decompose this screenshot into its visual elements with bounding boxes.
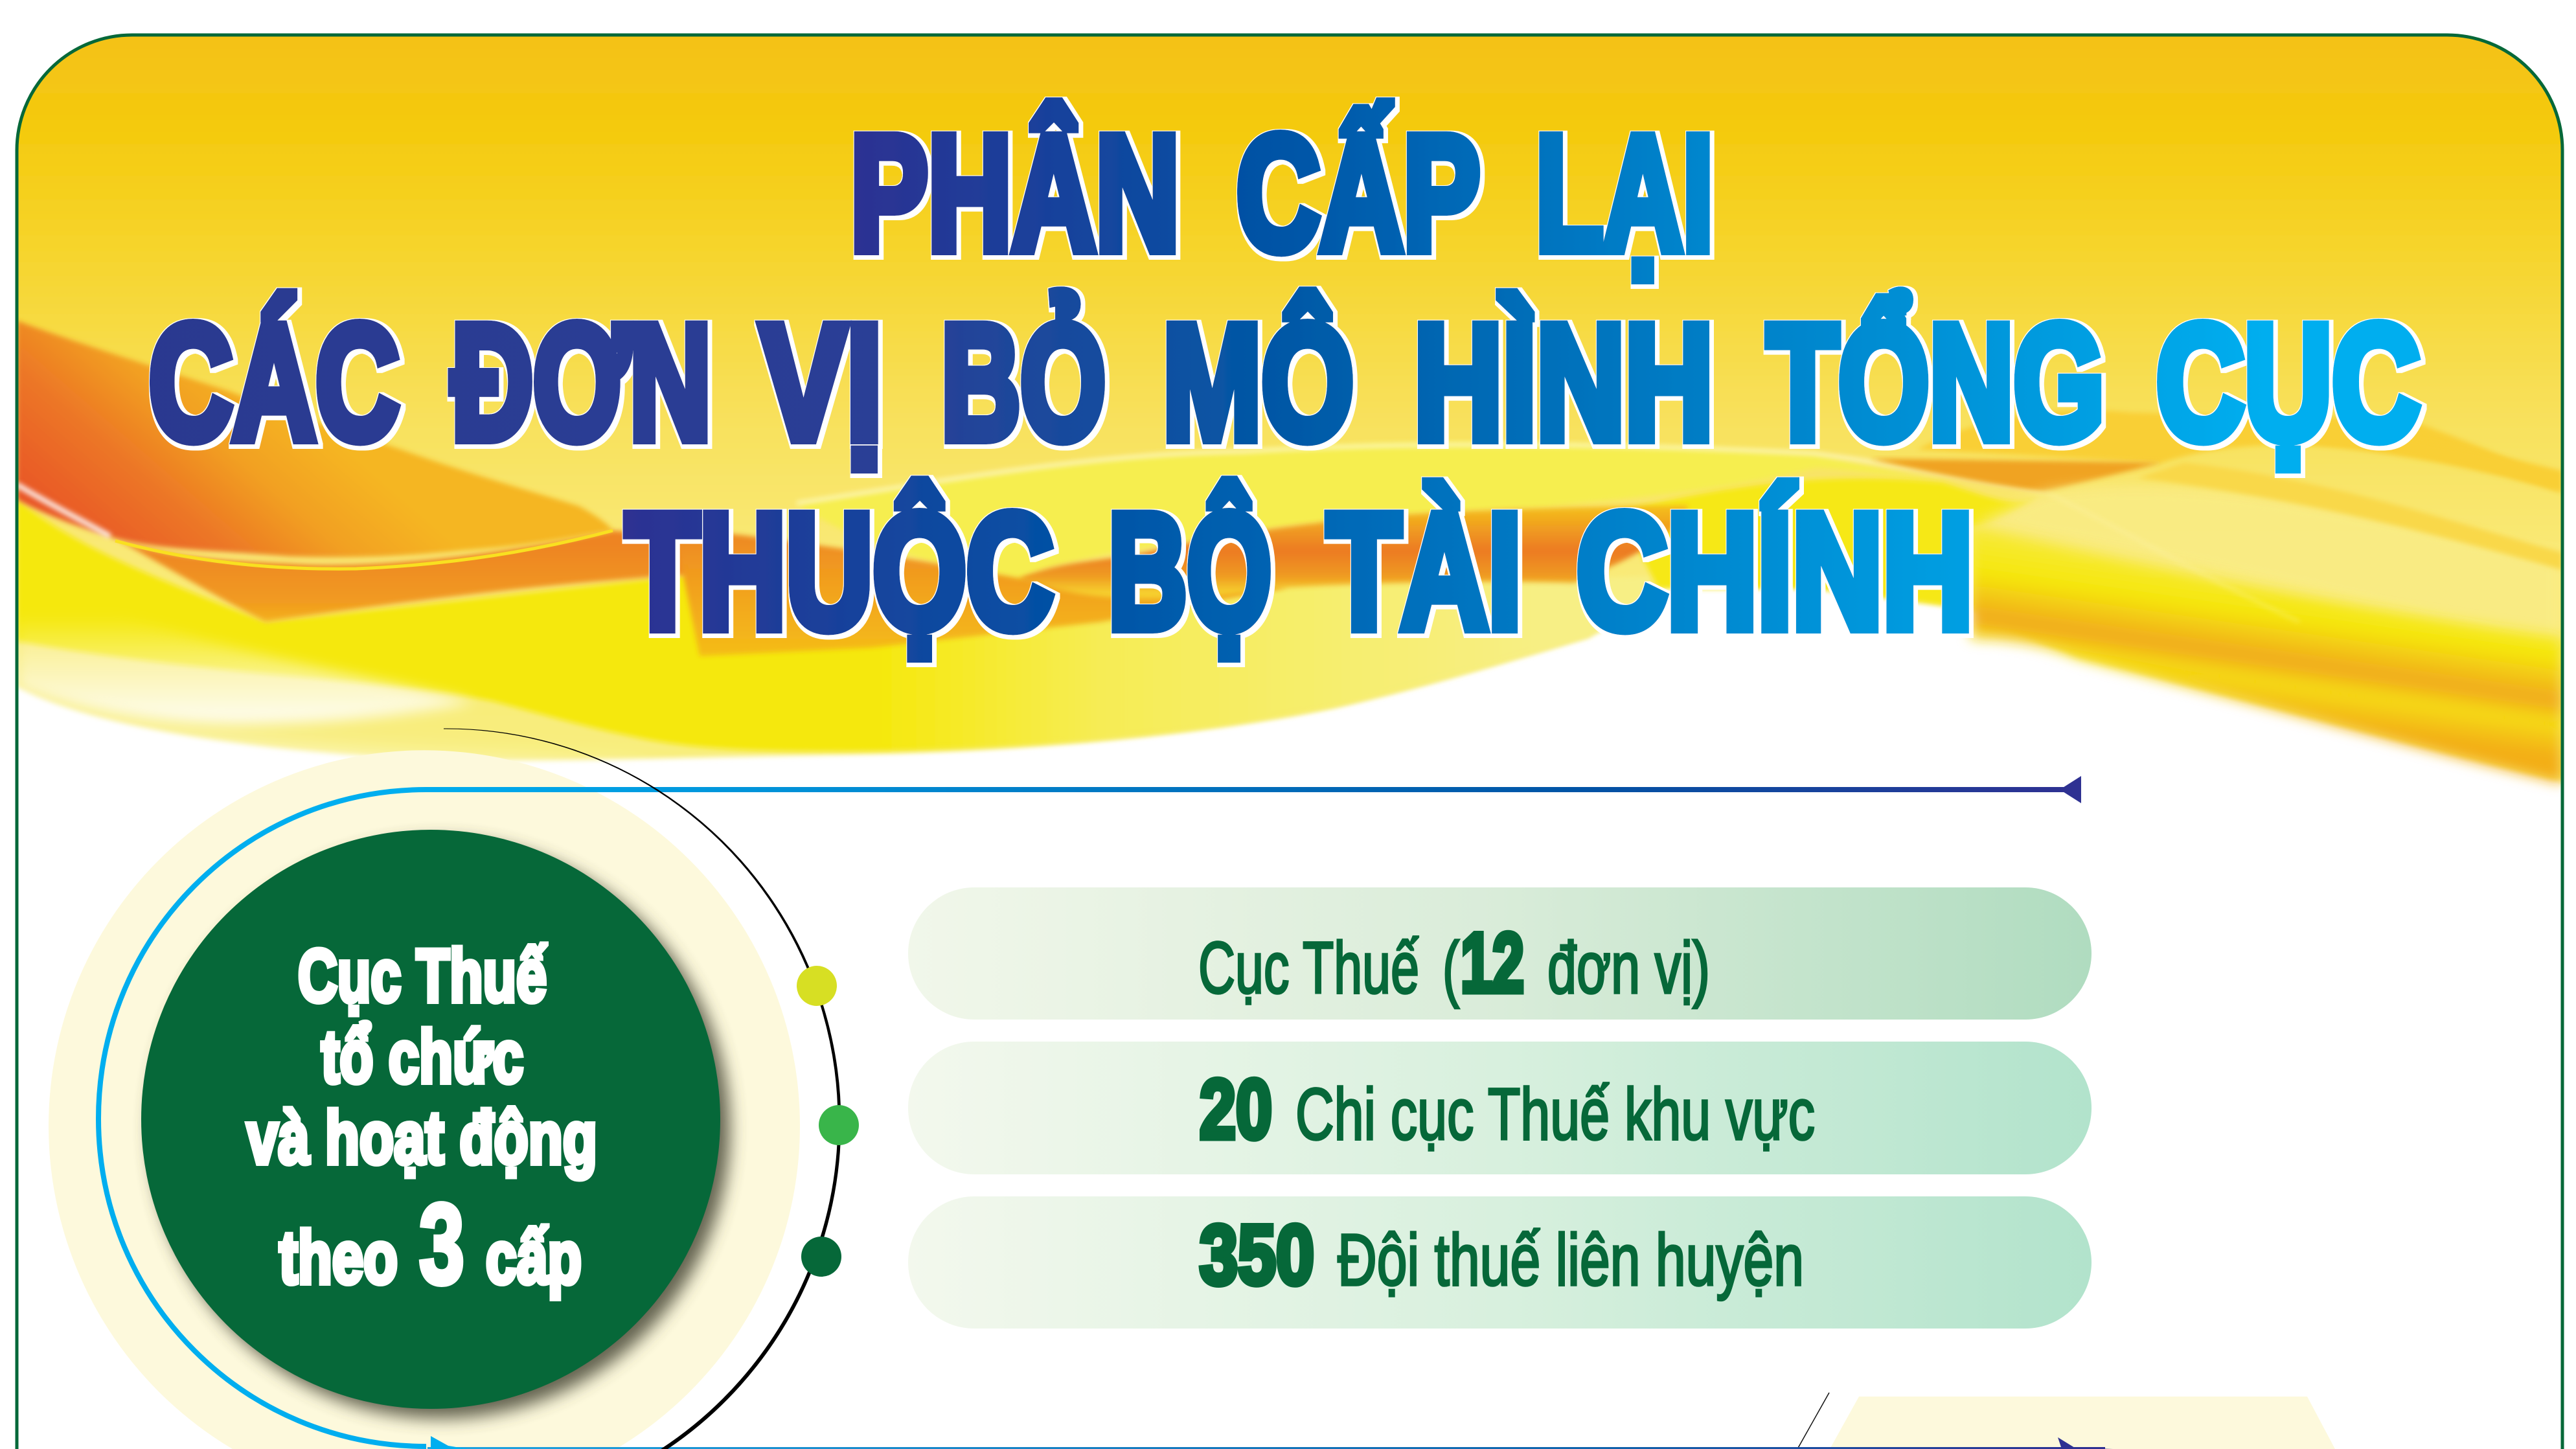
title: [149, 102, 2420, 663]
title line 2: HÌNH: [1414, 291, 1713, 473]
thin black line at bottom: [1797, 1393, 1829, 1449]
blue arc and top connector line: [98, 790, 2066, 1446]
title line 1: [850, 102, 1713, 284]
circle text: và hoạt động: [247, 1097, 597, 1180]
wave: light amber stripe one: [2137, 462, 2562, 570]
wave: right yellow orange wedge: [1971, 526, 2562, 783]
circle text: tổ chức: [321, 1016, 523, 1099]
wave: yellow ridge behind right text: [1619, 479, 2046, 609]
title line 2: TỔNG: [1767, 291, 2104, 473]
circle text: cấp: [486, 1216, 582, 1299]
green circle shadow: [151, 839, 730, 1419]
title line 1: PHÂN: [850, 102, 1180, 284]
pill: 350 Doi thue lien huyen: [908, 1196, 2092, 1329]
cream shape at bottom right: [1830, 1397, 2335, 1449]
pill: Cuc Thue 12 don vi: [908, 887, 2092, 1020]
panel: Cuc Thue circle diagram: [49, 729, 2335, 1449]
wave: lens highlight line: [797, 444, 2046, 503]
wave: bottom left white fade: [85, 711, 626, 763]
wave: left white lens: [18, 618, 473, 733]
title line 1: CẤP: [1237, 102, 1480, 284]
title line 3: CHÍNH: [1577, 481, 1973, 663]
wave: orange diamond right: [1870, 459, 2163, 492]
title line 3: [626, 481, 1973, 663]
wave: yellow base: [0, 0, 2576, 785]
title line 3: THUỘC: [626, 481, 1053, 663]
dot green: [819, 1105, 859, 1145]
pill: 20 Chi cuc Thue khu vuc: [908, 1042, 2092, 1174]
title line 2: CỤC: [2156, 291, 2420, 473]
circle text: 3: [419, 1181, 464, 1308]
dot yellow: [797, 966, 837, 1006]
wave: thin yellow ribbon: [115, 531, 613, 569]
title line 1: LẠI: [1536, 102, 1713, 284]
cream halo circle: [49, 750, 800, 1449]
wave: thin white highlight left: [17, 485, 110, 536]
wave: middle orange band: [1020, 505, 1689, 599]
circle text: theo: [279, 1216, 398, 1299]
dot dark green: [801, 1237, 841, 1277]
wave: lower orange band left: [115, 531, 694, 622]
arrow head bottom left: [431, 1436, 468, 1449]
pill: 20 Chi cuc Thue khu vuc: Chi cục Thuế khu vực: [1295, 1073, 1815, 1155]
pill: Cuc Thue 12 don vi: 12: [1461, 915, 1524, 1010]
title line 2: [149, 291, 2420, 473]
wave: pale edge line: [2046, 492, 2299, 622]
bottom connector line: [427, 1447, 2105, 1449]
title line 2: BỎ: [941, 291, 1106, 473]
wave: main orange swoosh left: [17, 321, 613, 557]
green circle: [141, 830, 720, 1409]
title line 3: TÀI: [1327, 481, 1522, 663]
black tapered arc: [444, 729, 841, 1449]
title line 2: ĐƠN: [451, 291, 711, 473]
wave: amber wedge under lens: [674, 528, 1287, 656]
wave: bright yellow lower body: [17, 499, 1652, 751]
wave: orange-yellow top arc right: [1917, 410, 2562, 492]
wave: upper yellow lens: [797, 442, 1943, 578]
arrow head bottom right: [2058, 1437, 2113, 1449]
arrow head top: [2060, 776, 2081, 803]
circle text: [247, 935, 597, 1308]
pill: Cuc Thue 12 don vi: (: [1442, 927, 1459, 1009]
pill: 350 Doi thue lien huyen: Đội thuế liên huyện: [1338, 1219, 1804, 1301]
pill: Cuc Thue 12 don vi: đơn vị): [1547, 927, 1710, 1009]
circle text: Cục Thuế: [298, 935, 547, 1018]
title line 3: BỘ: [1108, 481, 1271, 663]
pill: 20 Chi cuc Thue khu vuc: 20: [1200, 1062, 1272, 1156]
title line 2: CÁC: [149, 291, 399, 473]
pill: 350 Doi thue lien huyen: 350: [1200, 1207, 1314, 1302]
banner: yellow and orange wave background: [0, 0, 2576, 855]
wave: light amber stripe two: [2299, 421, 2562, 492]
title line 2: VỊ: [760, 291, 882, 473]
title line 2: MÔ: [1163, 291, 1354, 473]
wave: pale cream fan right: [1971, 485, 2562, 653]
pill: Cuc Thue 12 don vi: Cục Thuế: [1198, 927, 1419, 1009]
